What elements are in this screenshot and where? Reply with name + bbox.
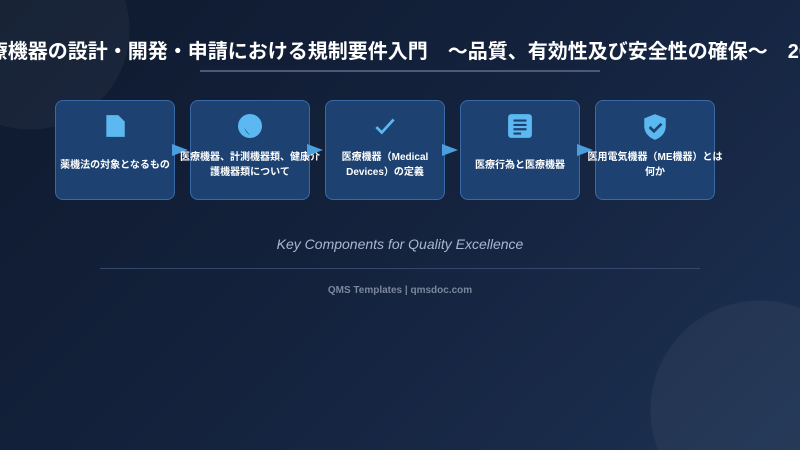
text: step 3: 医療機器（Medical <box>342 152 428 163</box>
text: step 5: 医用電気機器（ME機器）とは <box>588 152 722 163</box>
arrow 4 <box>577 144 593 156</box>
footer: QMS Templates | qmsdoc.com <box>328 285 472 296</box>
icon: circle <box>238 114 262 138</box>
panel: step 3 <box>325 100 445 200</box>
text: step 2: 護機器類について <box>210 167 290 178</box>
text: step 1: 薬機法の対象となるもの <box>60 160 170 170</box>
text: step 3 <box>342 151 428 178</box>
arrow 2 <box>307 144 323 156</box>
text: step 5: 何か <box>645 167 665 178</box>
text: step 2: 医療機器、計測機器類、健康介 <box>180 152 320 163</box>
icon: check <box>376 118 395 134</box>
icon: document <box>106 115 125 137</box>
panel: step 1 <box>55 100 175 200</box>
text: step 5 <box>588 151 722 178</box>
text: step 4: 医療行為と医療機器 <box>475 160 565 170</box>
arrow 3 <box>442 144 458 156</box>
panel: step 2 <box>190 100 310 200</box>
panel: step 5 <box>595 100 715 200</box>
text: step 3: Devices）の定義 <box>346 167 424 178</box>
icon: shield <box>644 114 666 140</box>
text: step 2 <box>180 151 320 178</box>
icon: list <box>508 114 532 138</box>
arrow 1 <box>172 144 188 156</box>
subtitle: Key Components for Quality Excellence <box>277 236 523 252</box>
panel: step 4 <box>460 100 580 200</box>
